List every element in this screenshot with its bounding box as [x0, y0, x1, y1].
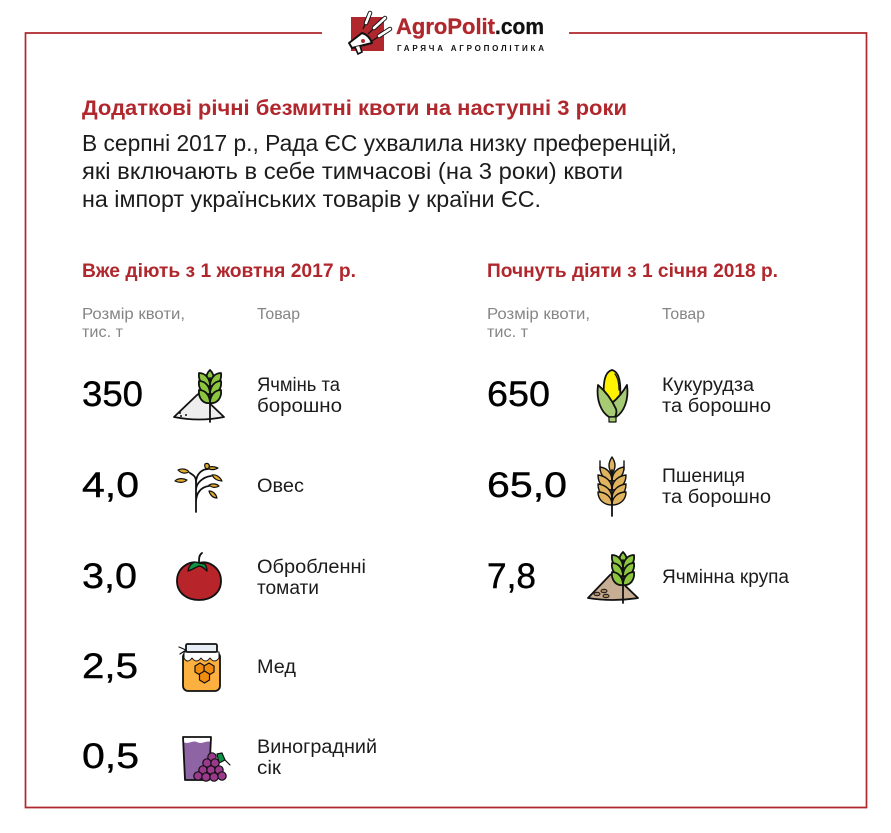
row: oats: 4,0 [82, 465, 139, 505]
row: honey [82, 644, 296, 691]
logo: AgroPolit: .com [495, 14, 544, 39]
label: Кукурудза [662, 375, 754, 396]
icon: wheat ear [598, 457, 626, 516]
row: wheat and flour: 65,0 [487, 465, 567, 505]
row: wheat and flour [487, 457, 771, 516]
icon: honey jar [179, 644, 220, 691]
intro text: які включають в себе тимчасові (на 3 роки) квоти [82, 158, 623, 184]
label: сік [257, 758, 282, 779]
column header: product: Товар [662, 306, 705, 323]
title: Додаткові річні безмитні квоти на наступні 3 роки [82, 96, 627, 120]
row: processed tomatoes [82, 553, 366, 600]
logo tagline: ГАРЯЧА АГРОПОЛІТИКА [397, 44, 544, 53]
icon: logo megaphone and wheat [349, 13, 390, 54]
row: barley and flour [82, 370, 342, 422]
logo: AgroPolit [349, 13, 544, 54]
row: oats [82, 463, 304, 512]
column header: quota size [82, 306, 185, 341]
label [662, 466, 771, 508]
row: barley groats: 7,8 [487, 556, 536, 596]
row: barley and flour: 350 [82, 374, 143, 414]
intro text: В серпні 2017 р., Рада ЄС ухвалила низку преференцій, [82, 130, 677, 156]
label: Мед [257, 657, 296, 678]
label: Ячмінь та [257, 375, 340, 396]
panel: quotas in force from 1 October 2017 [82, 260, 377, 781]
column header: quota size [487, 306, 590, 341]
row: honey: 2,5 [82, 646, 138, 686]
row: processed tomatoes: 3,0 [82, 556, 137, 596]
label: Обробленні [257, 557, 366, 578]
row: barley groats [487, 552, 789, 603]
intro text [82, 130, 677, 212]
icon: oat plant [175, 463, 222, 512]
label [257, 737, 377, 779]
logo wordmark: AgroPolit [396, 14, 495, 39]
label: Овес [257, 476, 304, 497]
column header: product: Товар [257, 306, 300, 323]
label [257, 375, 342, 417]
icon: tomato [177, 553, 221, 600]
heading: right column: Почнуть діяти з 1 січня 2018 р. [487, 260, 778, 282]
label: борошно [257, 396, 342, 417]
row: corn and flour [487, 370, 771, 422]
label [257, 557, 366, 599]
icon: grain pile with green wheat [588, 552, 638, 603]
intro text: на імпорт українських товарів у країни ЄС. [82, 186, 541, 212]
panel: quotas starting 1 January 2018 [487, 260, 789, 603]
column header: quota size: Розмір квоти, [82, 306, 185, 323]
label: та борошно [662, 487, 771, 508]
label: та борошно [662, 396, 771, 417]
icon: corn cob [598, 370, 627, 422]
row: corn and flour: 650 [487, 374, 550, 414]
label: Виноградний [257, 737, 377, 758]
column header: quota size: тис. т [82, 324, 124, 341]
label [662, 375, 771, 417]
icon: glass of grape juice with grapes [183, 737, 230, 781]
label: Ячмінна крупа [662, 567, 789, 588]
label: томати [257, 578, 319, 599]
row: grape juice [82, 736, 377, 781]
label: Пшениця [662, 466, 745, 487]
column header: quota size: Розмір квоти, [487, 306, 590, 323]
heading: left column: Вже діють з 1 жовтня 2017 р. [82, 260, 356, 282]
icon: flour pile with green wheat [174, 370, 224, 422]
row: grape juice: 0,5 [82, 736, 139, 776]
column header: quota size: тис. т [487, 324, 529, 341]
